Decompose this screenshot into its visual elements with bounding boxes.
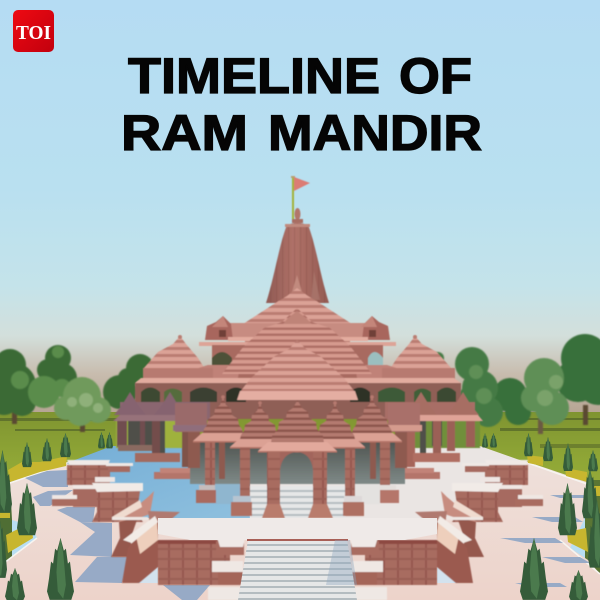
cypress trees right [482, 433, 600, 600]
upper mandapa tiers [228, 288, 368, 342]
porch outer steps [154, 468, 440, 479]
TOI logo: TOI [16, 22, 51, 44]
trees left [0, 345, 154, 432]
TOI logo [13, 10, 54, 52]
porch interior and inner stairs [190, 440, 405, 518]
flag [291, 176, 310, 221]
background: sky [0, 0, 600, 420]
front porch pillars [262, 452, 333, 518]
upper corner turrets [199, 316, 396, 346]
front platform [158, 518, 437, 540]
side columns of porch [188, 432, 407, 503]
trees right [432, 334, 600, 434]
left side steps and walls [52, 460, 246, 600]
side pyramid roofs [143, 335, 455, 379]
upper walls [212, 345, 383, 380]
lower right pavilion [385, 392, 483, 467]
front central staircase [238, 539, 357, 600]
right side steps and walls [349, 460, 543, 600]
title: RAM [121, 105, 248, 161]
title: MANDIR [268, 105, 482, 161]
upper arcade [135, 383, 461, 419]
central stepped tiers [222, 308, 372, 374]
title: OF [399, 48, 472, 104]
long eave [135, 378, 461, 383]
paved ground [0, 440, 600, 600]
kerb lines [0, 463, 600, 574]
cypress trees left [0, 432, 113, 600]
porch spire roofs [193, 395, 402, 448]
shikhara main spire [266, 208, 329, 303]
lawn [0, 412, 600, 600]
front central roof [237, 340, 358, 400]
title: TIMELINE [128, 48, 380, 104]
hedges [0, 455, 600, 553]
temple platform floor [67, 446, 528, 518]
porch front roof [258, 400, 337, 452]
outer porch pillars [231, 448, 364, 516]
title [121, 48, 482, 161]
ground shadows [25, 470, 590, 600]
temple [113, 176, 483, 518]
lower left pavilion [113, 392, 210, 467]
